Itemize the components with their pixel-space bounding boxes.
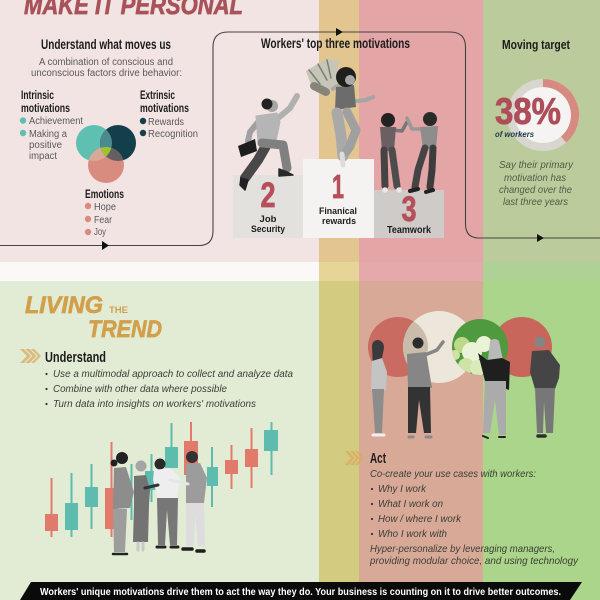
moving target description [499,159,574,208]
moving target description: changed over the [499,184,572,196]
icon: understand chevrons [20,349,41,363]
panel: workers' top three motivations [233,35,444,238]
donut chart: 38 percent [495,83,575,147]
figure: four people facing the circles [371,336,560,438]
list: emotions: Fear [94,215,113,226]
text block: act [369,450,579,567]
heading: understand: Understand [45,349,106,366]
text block: act: Hyper-personalize by leveraging managers, [370,543,555,555]
podium: third place: 3 [402,190,416,229]
text block: act: How / where I work [378,513,462,525]
list: extrinsic motivations [140,90,198,140]
text block: act: Who I work with [378,528,447,540]
heading: top three motivations: Workers' top three motivations [261,35,410,51]
list: extrinsic motivations: motivations [140,103,189,115]
chart: candlesticks [45,422,278,537]
heading: living the trend: TREND [88,316,162,343]
podium: second place: 2 [260,176,276,215]
text block: act: Why I work [378,483,427,495]
intro text [31,57,182,79]
venn diagram [76,125,136,183]
banner: takeaway: Workers' unique motivations drive them to act the way they do. Your business is counting on it to drive better outcomes. [40,587,561,598]
podium: first place [303,159,374,238]
text block: understand: Use a multimodal approach to collect and analyze data [53,368,293,380]
podium: second place [233,175,303,238]
text block: act: Co-create your use cases with workers: [370,468,536,480]
list: emotions: Joy [94,227,106,238]
list: intrinsic motivations: impact [29,151,57,162]
figure: four colleagues talking [110,451,207,554]
list: extrinsic motivations: Extrinsic [140,90,175,102]
banner: takeaway [20,582,582,600]
list: intrinsic motivations: motivations [21,103,70,115]
list: intrinsic motivations: Achievement [29,116,83,127]
text block: act: What I work on [378,498,443,510]
list: emotions: Hope [94,202,116,213]
figure: jumping man with briefcase [238,96,297,190]
flow line with arrows [0,28,600,250]
text block: understand [45,349,293,410]
text block: act: providing modular choice, and using technology [369,555,579,567]
heading: moving target: Moving target [502,37,571,52]
text block: understand: Combine with other data where possible [53,383,227,395]
illustration: overlapping circles [368,311,552,383]
list: extrinsic motivations: Rewards [148,117,184,128]
moving target description: last three years [503,196,569,208]
figure: woman holding cash [306,59,373,165]
flora inside green circle [452,336,491,375]
podium: second place: Job [260,214,277,225]
donut chart: 38 percent: 38% [495,91,561,132]
donut chart: 38 percent: of workers [495,129,534,139]
figure: two women high-fiving [380,112,438,192]
podium: first place: Finanical [319,206,357,217]
text block: understand: Turn data into insights on workers' motivations [53,398,257,410]
icon: act chevrons [345,451,364,465]
panel: moving target [495,37,575,208]
moving target description: motivation has [504,172,567,184]
moving target description: Say their primary [499,159,574,171]
podium: first place: rewards [322,216,356,227]
heading: understand what moves us: Understand what moves us [41,36,171,52]
list: intrinsic motivations: Making a [29,129,67,140]
podium: second place: Security [251,224,286,235]
list: emotions: Emotions [85,189,124,201]
heading: living the trend: THE [109,305,128,315]
list: emotions [85,189,124,238]
heading: act: Act [370,450,386,467]
podium: third place [374,190,444,238]
podium: third place: Teamwork [387,225,431,236]
list: intrinsic motivations: positive [29,140,62,151]
list: intrinsic motivations: Intrinsic [21,90,54,102]
list: intrinsic motivations [20,90,83,162]
intro text: A combination of conscious and [39,57,173,68]
panel: understand what moves us [20,36,198,238]
heading: living the trend [25,292,162,343]
intro text: unconscious factors drive behavior: [31,68,182,79]
list: extrinsic motivations: Recognition [148,129,198,140]
heading: living the trend: LIVING [25,292,103,319]
podium: first place: 1 [332,168,344,205]
